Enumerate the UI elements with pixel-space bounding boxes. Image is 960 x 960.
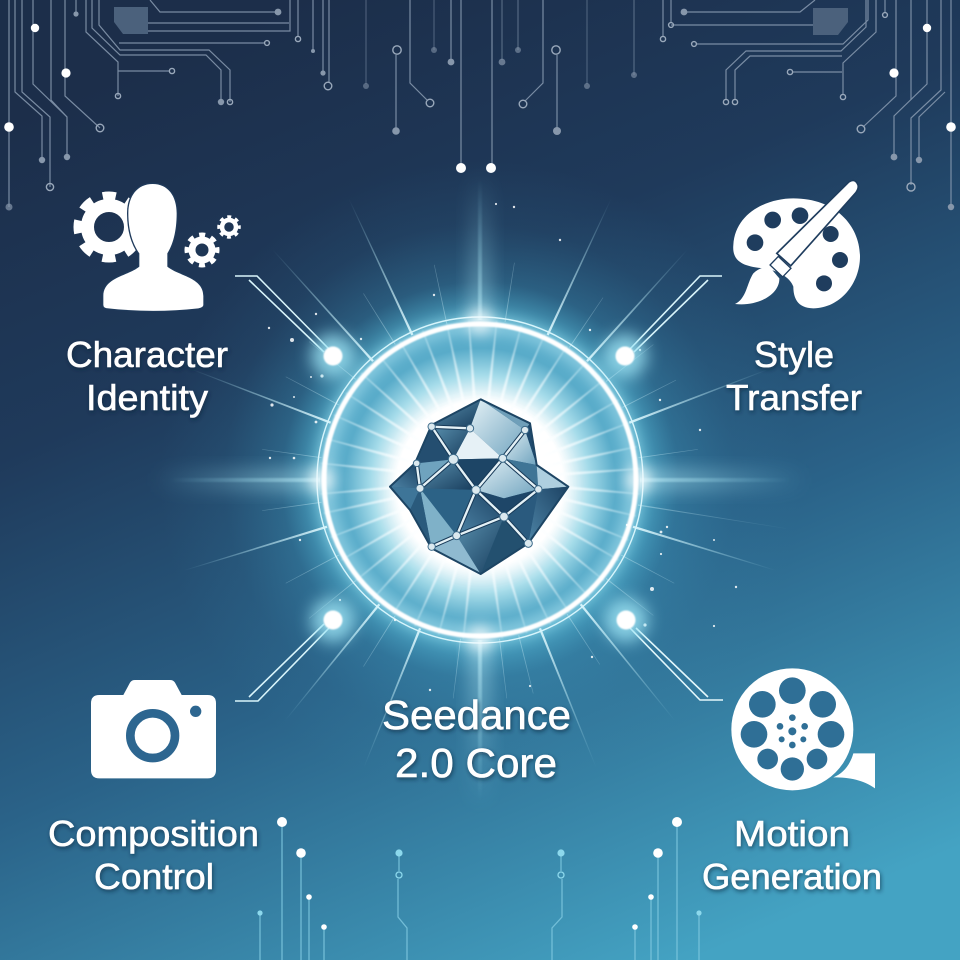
label: Motion Generation: Generation: [702, 856, 882, 897]
label: Seedance 2.0 Core: 2.0 Core: [395, 740, 557, 786]
label: Composition Control: Control: [94, 856, 214, 897]
label: Motion Generation: [702, 813, 882, 897]
icon: camera: [91, 680, 216, 778]
circuit chip: top left: [114, 7, 148, 34]
glow streaks: [150, 170, 810, 810]
label: Motion Generation: Motion: [734, 813, 850, 854]
connector: bottom right: [604, 598, 723, 700]
crystal joints: [413, 423, 542, 550]
circuit traces and nodes: bottom: [257, 817, 702, 960]
inner rays: [320, 320, 640, 639]
icon: crystal polyhedron: [390, 399, 568, 574]
connector: top left: [235, 276, 355, 378]
label: Style Transfer: [726, 334, 862, 418]
circuit nodes: top right: [486, 9, 956, 210]
outer halo: [160, 160, 800, 800]
label: Style Transfer: Style: [754, 334, 834, 375]
large gear: [78, 196, 140, 258]
central energy core: [150, 160, 810, 810]
label: Composition Control: [48, 813, 259, 897]
circuit nodes: top left: [4, 9, 466, 210]
central white glow: [402, 414, 558, 570]
medium gear: [187, 235, 217, 265]
label: Style Transfer: Transfer: [726, 377, 862, 418]
label: Character Identity: Character: [66, 334, 228, 375]
person silhouette: [103, 184, 203, 311]
bright outer rays: [183, 198, 777, 768]
icon: palette and brush: [733, 181, 860, 308]
label: Seedance 2.0 Core: Seedance: [382, 692, 571, 738]
label: Composition Control: Composition: [48, 813, 259, 854]
crystal struts: [417, 427, 538, 547]
connector: bottom left: [235, 598, 355, 701]
disk inside the ring: [320, 320, 640, 640]
label: Seedance 2.0 Core: [382, 692, 571, 786]
sparkle particles: [268, 203, 737, 691]
connector: top right: [603, 276, 722, 378]
label: Character Identity: Identity: [86, 377, 208, 418]
ring flares: [311, 311, 649, 649]
circuit traces: top left: [9, 0, 461, 207]
label: Character Identity: [66, 334, 228, 418]
outer rays: [262, 263, 786, 698]
icon: character identity person with gears: [78, 184, 239, 311]
circuit traces: top right: [492, 0, 951, 205]
glowing ring: [317, 317, 643, 643]
crystal outline: [390, 399, 568, 574]
brush: [778, 181, 857, 265]
icon: film reel: [731, 668, 875, 790]
circuit chip: top right: [813, 8, 848, 35]
small gear: [219, 217, 239, 237]
